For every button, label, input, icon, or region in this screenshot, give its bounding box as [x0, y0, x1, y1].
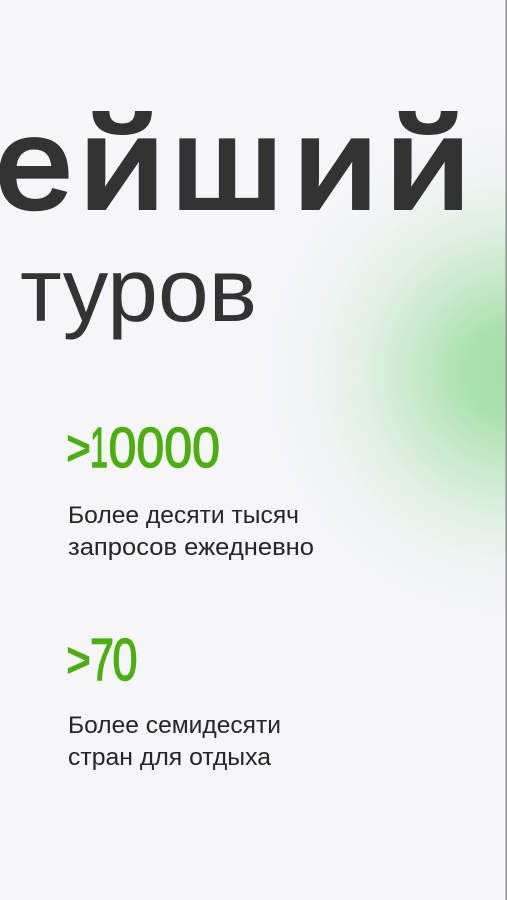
- stat description: countries: Более семидесяти: [68, 712, 281, 739]
- stat number: 70: 7: [90, 627, 114, 693]
- stat description: countries: стран для отдыха: [68, 744, 271, 771]
- stat number: 10000: 1: [90, 416, 108, 480]
- stat block: countries: [66, 627, 281, 771]
- stat number: 10000: 0000: [108, 416, 220, 480]
- stat number: 70: [66, 627, 138, 693]
- right edge line: [506, 0, 507, 900]
- heading: cropped bold word: ш: [172, 93, 282, 236]
- stat block: requests: [66, 416, 314, 561]
- stat number: 70: >: [66, 632, 91, 688]
- subheading: туров: [20, 241, 257, 341]
- stat number: 70: 0: [112, 627, 138, 693]
- stat description: requests: Более десяти тысяч: [68, 502, 299, 529]
- green gradient glow: [260, 120, 507, 630]
- stat number: 10000: [66, 416, 220, 480]
- heading: cropped bold word: й: [386, 93, 470, 236]
- stat number: 10000: >: [66, 420, 91, 476]
- stat description: requests: запросов ежедневно: [68, 534, 314, 561]
- heading: cropped bold word: й: [80, 93, 164, 236]
- heading: cropped bold word: и: [294, 93, 378, 236]
